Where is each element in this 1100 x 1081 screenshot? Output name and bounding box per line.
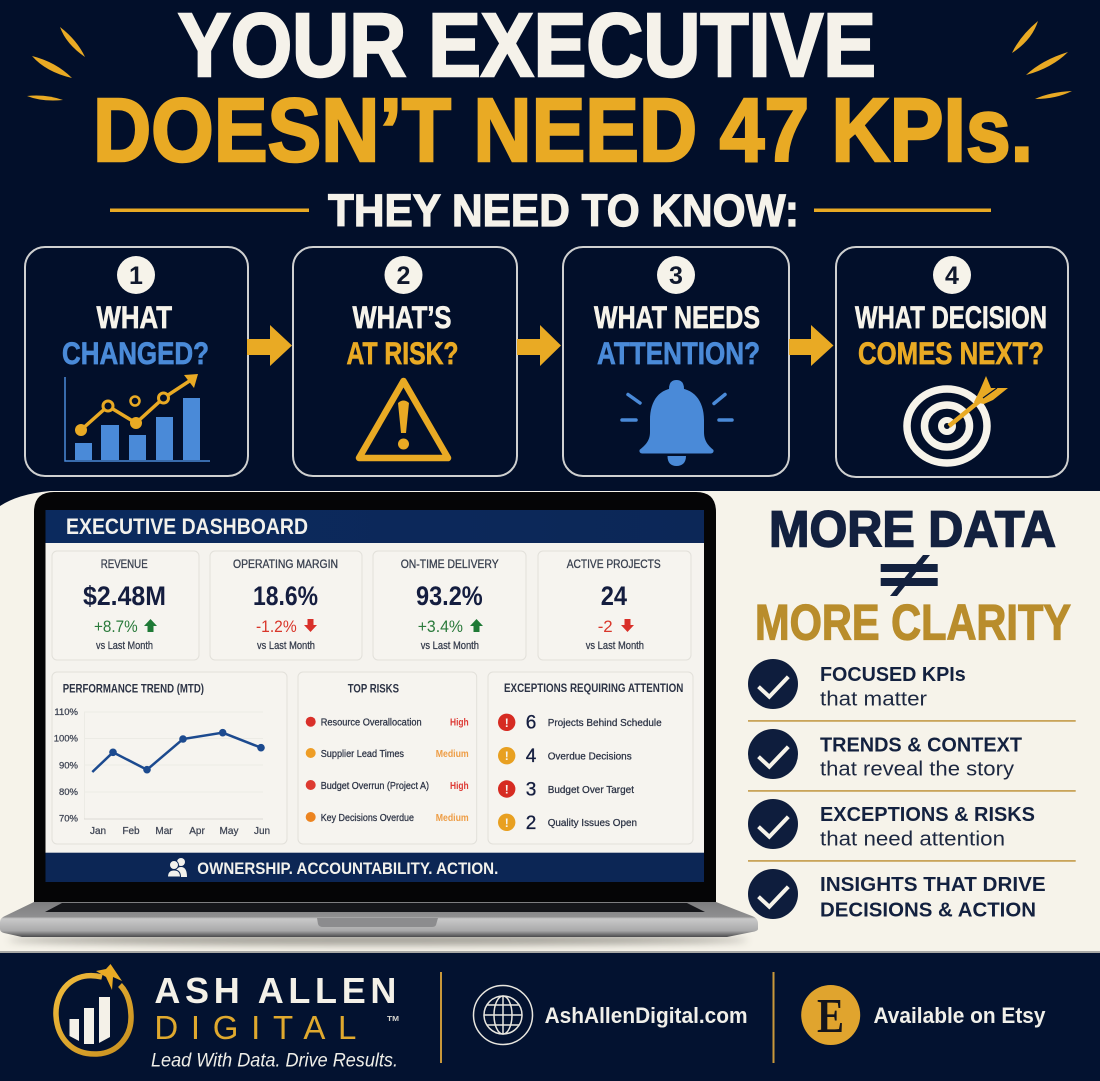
panel: performance trend: 110%	[54, 707, 79, 718]
panel: performance trend: 90%	[59, 760, 79, 772]
panel: exceptions: 2	[526, 813, 536, 834]
kpi: operating margin: vs Last Month	[257, 640, 315, 652]
subtitle	[110, 185, 991, 236]
laptop bezel	[34, 492, 716, 902]
kpi: on-time delivery: +3.4%	[418, 617, 463, 636]
kpi: revenue: +8.7%	[94, 617, 138, 636]
kpi: revenue: REVENUE	[101, 557, 148, 571]
panel: top risks: High	[450, 716, 469, 728]
kpi: on-time delivery	[373, 551, 526, 660]
brand name	[151, 970, 399, 1072]
icon: etsy badge	[801, 985, 860, 1045]
kpi: active projects	[538, 551, 691, 660]
arrow 2	[517, 325, 561, 366]
dashboard header: EXECUTIVE DASHBOARD	[66, 514, 308, 539]
item: exceptions and risks: EXCEPTIONS & RISKS	[820, 803, 1035, 826]
panel: exceptions: 6	[526, 712, 536, 734]
panel: top risks: Medium	[436, 748, 469, 760]
panel: top risks	[298, 672, 477, 844]
card 1: what changed	[25, 247, 248, 476]
dashboard header	[46, 510, 704, 543]
brand name: Lead With Data. Drive Results.	[151, 1051, 398, 1072]
laptop base	[0, 902, 758, 945]
arrow 1	[247, 325, 292, 366]
card 2: what's at risk: 2	[397, 262, 410, 290]
card 4: what decision comes next: 4	[945, 262, 959, 290]
card 1: what changed: WHAT	[96, 299, 172, 335]
panel: performance trend: Feb	[122, 826, 140, 837]
arrow 3	[789, 325, 834, 366]
item: insights	[748, 869, 1046, 922]
card 2: what's at risk: WHAT’S	[352, 299, 452, 335]
panel: exceptions: !	[505, 782, 509, 796]
icon: bar and line chart	[65, 374, 210, 461]
panel: exceptions: Quality Issues Open	[548, 818, 637, 829]
panel: performance trend: PERFORMANCE TREND (MTD)	[63, 684, 204, 696]
item: exceptions and risks: that need attention	[820, 829, 1005, 851]
icon: target with dart	[907, 376, 1008, 463]
item: trends and context: that reveal the story	[820, 759, 1014, 781]
panel: top risks: TOP RISKS	[348, 684, 399, 696]
panel: top risks: Budget Overrun (Project A)	[321, 781, 429, 792]
kpi: operating margin	[210, 551, 362, 660]
panel: performance trend: Jun	[254, 826, 270, 837]
title	[93, 0, 1033, 181]
kpi: active projects: 24	[601, 581, 627, 611]
card 4: what decision comes next: COMES NEXT?	[858, 335, 1044, 371]
panel: top risks: High	[450, 780, 469, 792]
brand name: ASH ALLEN	[154, 970, 396, 1011]
card 3: what needs attention: ATTENTION?	[597, 335, 760, 371]
icon: not equal	[881, 555, 938, 596]
item: focused kpis	[748, 659, 966, 711]
card 3: what needs attention: 3	[669, 262, 683, 290]
footer	[0, 951, 1100, 1081]
kpi: on-time delivery: 93.2%	[416, 581, 483, 611]
heading: more data not equal more clarity	[755, 500, 1071, 650]
panel: exceptions: Overdue Decisions	[548, 752, 632, 762]
panel: exceptions: Budget Over Target	[548, 785, 634, 796]
brand name: TM	[387, 1014, 399, 1023]
card 1: what changed: CHANGED?	[62, 335, 209, 371]
logo	[56, 964, 131, 1054]
kpi: revenue: $2.48M	[83, 581, 166, 611]
card 3: what needs attention	[563, 247, 789, 476]
heading: more data not equal more clarity: MORE DATA	[769, 500, 1056, 558]
panel: performance trend	[52, 672, 287, 844]
screen	[46, 510, 704, 882]
panel: exceptions: 3	[526, 780, 536, 800]
dashboard footer banner	[46, 853, 704, 882]
decorative rays	[27, 21, 1072, 100]
panel: exceptions: Projects Behind Schedule	[548, 718, 662, 729]
laptop	[0, 492, 758, 945]
card 3: what needs attention: WHAT NEEDS	[594, 299, 760, 335]
kpi: operating margin: -1.2%	[256, 617, 297, 636]
panel: top risks: Resource Overallocation	[321, 718, 422, 728]
panel: exceptions: 4	[526, 746, 537, 767]
brand name: DIGITAL	[154, 1009, 356, 1046]
icon: people	[168, 858, 187, 877]
kpi: active projects: -2	[598, 617, 613, 636]
item: insights: DECISIONS & ACTION	[820, 899, 1036, 922]
dashboard footer banner: OWNERSHIP. ACCOUNTABILITY. ACTION.	[197, 860, 498, 878]
item: exceptions and risks	[748, 799, 1035, 851]
card 2: what's at risk: AT RISK?	[346, 335, 458, 371]
panel: performance trend: Jan	[90, 826, 106, 837]
panel: exceptions	[488, 672, 693, 844]
panel: exceptions: !	[505, 749, 509, 763]
panel: top risks: Key Decisions Overdue	[321, 813, 414, 824]
panel: exceptions: !	[505, 816, 509, 830]
subtitle: THEY NEED TO KNOW:	[328, 185, 799, 236]
panel: exceptions: !	[505, 716, 509, 730]
panel: performance trend: Apr	[189, 826, 205, 837]
card 2: what's at risk	[293, 247, 517, 476]
checklist	[748, 659, 1076, 922]
kpi: active projects: ACTIVE PROJECTS	[567, 557, 661, 571]
website: AshAllenDigital.com	[545, 1003, 748, 1028]
panel: performance trend: 70%	[59, 814, 79, 824]
item: insights: INSIGHTS THAT DRIVE	[820, 873, 1046, 896]
panel: exceptions: EXCEPTIONS REQUIRING ATTENTION	[504, 683, 683, 695]
icon: warning triangle	[359, 381, 448, 458]
lower cream panel	[0, 491, 1100, 951]
kpi: on-time delivery: ON-TIME DELIVERY	[401, 557, 499, 571]
icon: etsy badge: E	[817, 988, 844, 1043]
icon: globe	[474, 986, 532, 1044]
kpi: revenue	[52, 551, 199, 660]
panel: top risks: Medium	[436, 812, 469, 824]
item: trends and context: TRENDS & CONTEXT	[820, 734, 1022, 757]
card 4: what decision comes next	[836, 247, 1068, 477]
item: focused kpis: FOCUSED KPIs	[820, 663, 966, 686]
card 1: what changed: 1	[129, 262, 143, 290]
etsy label: Available on Etsy	[874, 1003, 1046, 1028]
kpi: on-time delivery: vs Last Month	[421, 640, 479, 652]
kpi: revenue: vs Last Month	[96, 640, 153, 652]
line chart	[92, 729, 265, 774]
panel: performance trend: 100%	[54, 734, 79, 744]
panel: performance trend: Mar	[155, 826, 173, 837]
panel: performance trend: May	[220, 826, 238, 837]
icon: bell	[622, 380, 732, 466]
kpi: operating margin: OPERATING MARGIN	[233, 557, 338, 571]
kpi: active projects: vs Last Month	[586, 640, 644, 652]
kpi: operating margin: 18.6%	[253, 581, 318, 611]
item: focused kpis: that matter	[820, 689, 927, 711]
panel: top risks: Supplier Lead Times	[321, 749, 404, 760]
panel: performance trend: 80%	[59, 787, 79, 798]
item: trends and context	[748, 729, 1022, 781]
